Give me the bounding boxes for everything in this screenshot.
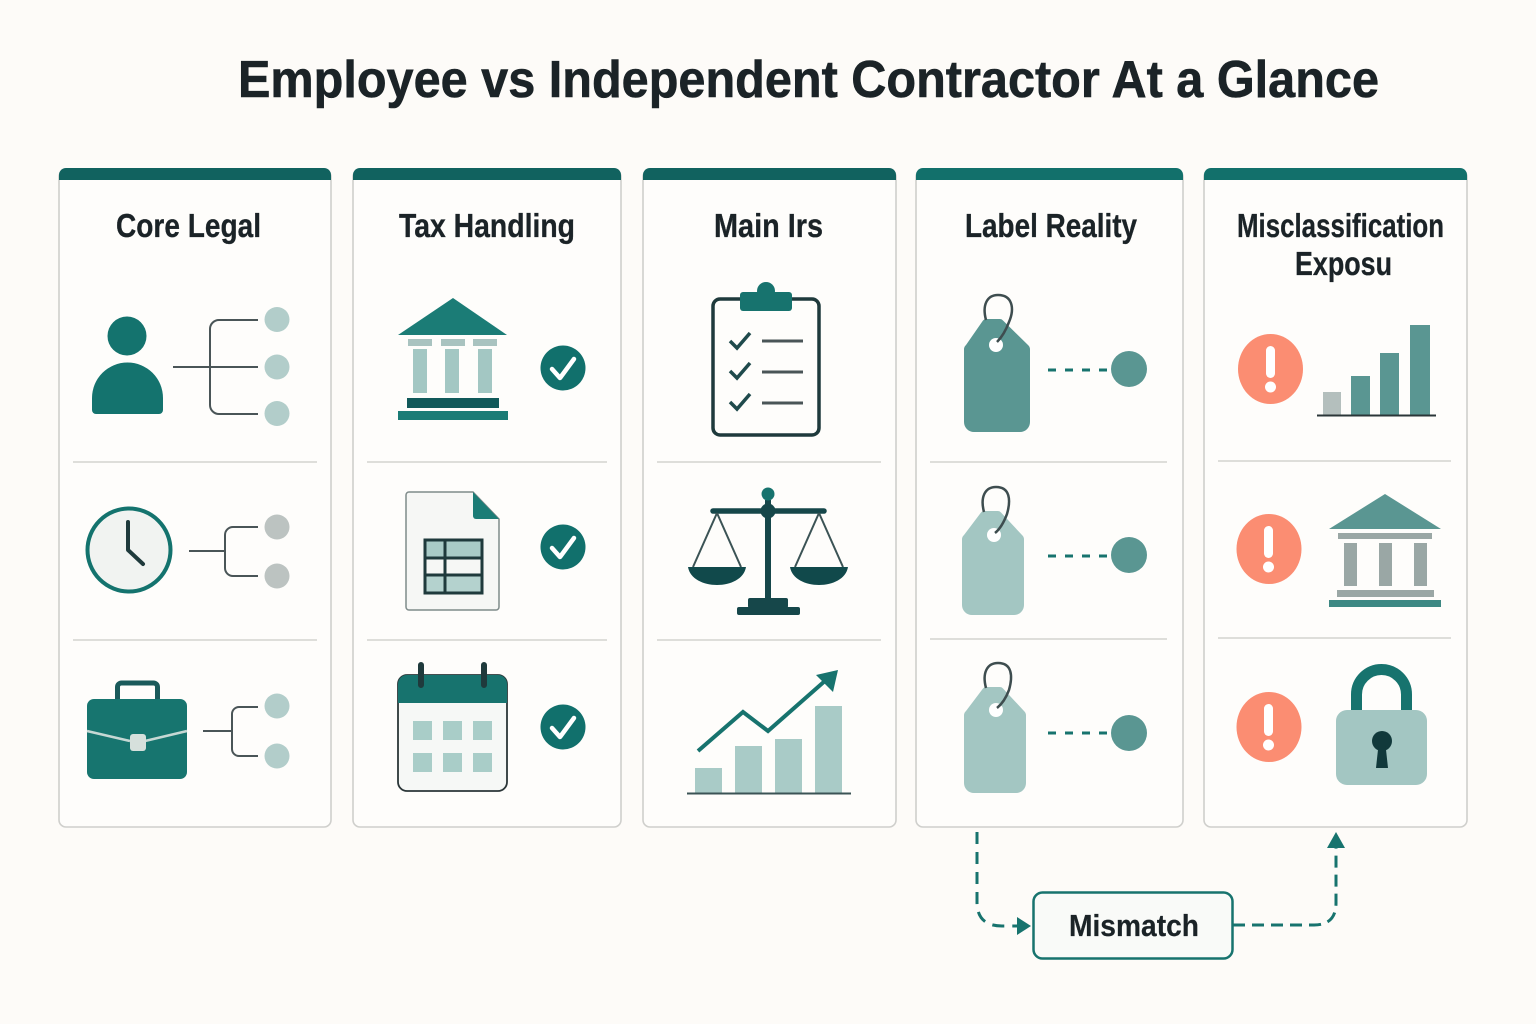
panel: misclassification exposure: [1204, 168, 1467, 827]
title: Employee vs Independent Contractor At a Glance: [238, 51, 1379, 109]
callout: mismatch: Mismatch: [1069, 908, 1199, 943]
heading: tax handling: Tax Handling: [399, 207, 575, 244]
panel: core legal: [59, 168, 331, 827]
panel: label reality: [916, 168, 1183, 827]
panel: tax handling: [353, 168, 621, 827]
icon: spreadsheet document with check: [406, 492, 586, 610]
callout: mismatch: [1034, 892, 1232, 958]
arrow: mismatch to misclassification exposure: [1233, 832, 1345, 925]
icon: calendar with check: [398, 665, 586, 791]
icon: briefcase with two branches: [87, 683, 290, 779]
icon: light tag with dashed link: [962, 487, 1147, 615]
arrow: label reality to mismatch: [977, 832, 1031, 935]
icon: light tag with dashed link: [964, 663, 1147, 793]
icon: dark tag with dashed link: [964, 295, 1147, 432]
icon: alert with padlock: [1236, 670, 1427, 785]
icon: clock with two branches: [88, 508, 290, 592]
icon: clipboard checklist: [713, 282, 819, 435]
heading: misclassification exposu: Misclassification: [1237, 207, 1444, 244]
icon: bank with check: [398, 298, 586, 420]
heading: misclassification exposu: [1237, 207, 1444, 282]
icon: balance scale: [688, 488, 848, 615]
panel: main irs: [643, 168, 896, 827]
heading: label reality: Label Reality: [965, 207, 1138, 244]
icon: growth chart with arrow: [687, 670, 851, 794]
icon: alert with bank: [1236, 494, 1441, 607]
heading: core legal: Core Legal: [116, 207, 261, 244]
heading: main irs: Main Irs: [714, 207, 823, 244]
icon: alert with rising bars: [1238, 325, 1436, 416]
icon: person with three branches: [92, 307, 290, 426]
heading: misclassification exposu: Exposu: [1295, 245, 1392, 282]
